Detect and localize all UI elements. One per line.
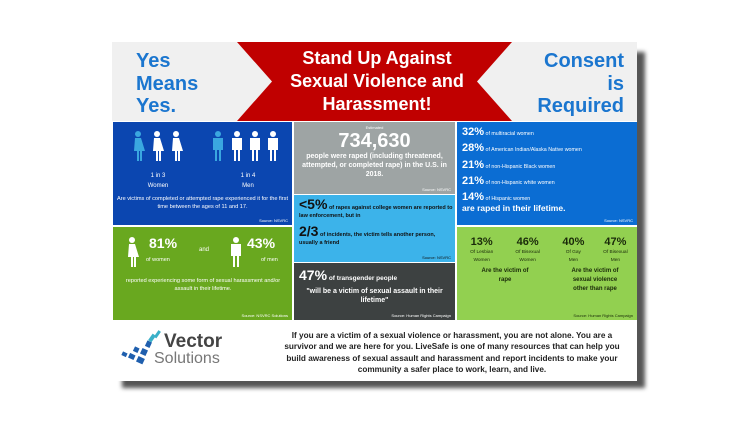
panel: college women: Source: NSVRC xyxy=(422,255,451,260)
icon: man xyxy=(231,237,241,267)
panel: race stats xyxy=(457,122,637,225)
panel: LGB stats: Women xyxy=(473,258,490,263)
panel: race stats: 32% of multiracial women xyxy=(462,126,534,138)
panel: race stats: Source: NSVRC xyxy=(604,218,633,223)
panel: LGB stats: Men xyxy=(569,258,578,263)
stat: 43%: 43% xyxy=(247,235,275,251)
heading: yes means yes: Means xyxy=(136,72,198,94)
panel: LGB stats xyxy=(457,227,637,320)
panel: LGB stats: Source: Human Rights Campaign xyxy=(573,313,633,318)
stat: 81%: 81% xyxy=(149,235,177,251)
panel: transgender: Source: Human Rights Campaign xyxy=(391,313,451,318)
panel: LGB stats: Of Bisexual xyxy=(603,250,628,255)
panel: 81% / 43%: reported experiencing some form of sexual harassment and/or assault in their lifetime. xyxy=(126,278,280,292)
footer text xyxy=(284,331,620,374)
panel: transgender: "will be a victim of sexual assault in their lifetime" xyxy=(306,288,443,304)
panel: transgender xyxy=(294,263,455,320)
panel: race stats: 14% of Hispanic women xyxy=(462,191,530,203)
panel: 1 in 3 / 1 in 4 xyxy=(113,122,292,225)
stat: 1 in 4 men xyxy=(241,172,256,189)
panel: LGB stats: Are the victim of xyxy=(481,268,528,274)
panel: LGB stats: Are the victim of xyxy=(571,268,618,274)
panel: 81% / 43%: Source: NSVRC Solutions xyxy=(242,313,288,318)
footer text: build awareness of sexual assault and harassment and report incidents to make your xyxy=(286,354,618,363)
panel: race stats: 21% of non-Hispanic white women xyxy=(462,175,555,187)
logo: Vector Solutions xyxy=(121,330,222,367)
logo: Vector Solutions: Solutions xyxy=(154,350,220,367)
panel: 81% / 43% xyxy=(113,227,292,320)
panel: 81% / 43%: of men xyxy=(261,257,278,263)
stat: 1 in 4 men: 1 in 4 xyxy=(241,173,255,179)
panel: race stats: are raped in their lifetime. xyxy=(462,203,565,213)
panel: LGB stats: 13% xyxy=(471,236,493,248)
logo: Vector Solutions: Vector xyxy=(164,331,222,352)
stat: 1 in 3 women xyxy=(148,172,168,189)
panel: college women: <5% of rapes against college women are reported to law enforcement, but in xyxy=(299,196,452,219)
panel: estimated 734,630: Source: NSVRC xyxy=(422,187,451,192)
panel: LGB stats: Of Bisexual xyxy=(515,250,540,255)
panel: college women: 2/3 of incidents, the victim tells another person, usually a friend xyxy=(299,223,435,246)
title: Stand Up Against xyxy=(302,48,452,68)
icons: women xyxy=(134,131,183,161)
stat: 1 in 3 women: Women xyxy=(148,183,168,189)
panel: estimated 734,630 xyxy=(294,122,455,194)
title xyxy=(290,48,464,114)
panel: transgender: 47% of transgender people xyxy=(299,267,397,283)
icons: men xyxy=(213,131,278,161)
panel: 81% / 43%: and xyxy=(199,247,209,253)
icon: woman xyxy=(128,237,139,267)
panel: LGB stats: other than rape xyxy=(573,286,617,292)
footer text: If you are a victim of a sexual violence or harassment, you are not alone. You are a xyxy=(292,331,612,340)
panel: LGB stats: Men xyxy=(611,258,620,263)
header xyxy=(112,42,637,121)
footer text: community a safer place to work, learn, and live. xyxy=(358,365,546,374)
heading: consent is required xyxy=(537,50,624,117)
card xyxy=(112,42,637,381)
panel: LGB stats: rape xyxy=(499,277,511,283)
big number: 734,630 xyxy=(338,130,411,152)
panel: 81% / 43%: of women xyxy=(146,257,170,263)
stat: 1 in 3 women: 1 in 3 xyxy=(151,173,165,179)
card shadow xyxy=(122,52,645,388)
panel: LGB stats: 46% xyxy=(517,236,539,248)
panel: estimated 734,630: Estimated xyxy=(366,125,383,130)
footer text: survivor and we are here for you. LiveSafe is one of many resources that can help you xyxy=(284,342,620,351)
heading: consent is required: Consent xyxy=(544,50,624,72)
heading: yes means yes: Yes xyxy=(136,50,170,72)
panel: 1 in 3 / 1 in 4: Source: NSVRC xyxy=(259,218,288,223)
panel: LGB stats: 47% xyxy=(604,236,626,248)
panel: college women xyxy=(294,195,455,262)
heading: yes means yes xyxy=(136,50,198,117)
heading: consent is required: is xyxy=(607,72,624,94)
panel: race stats: 21% of non-Hispanic Black women xyxy=(462,159,555,171)
heading: consent is required: Required xyxy=(537,95,624,117)
panel: estimated 734,630: people were raped (including threatened, attempted, or completed rape) in the U.S. in 2018. xyxy=(302,153,447,178)
panel: LGB stats: sexual violence xyxy=(573,277,617,283)
title banner xyxy=(237,42,512,121)
panel: LGB stats: Women xyxy=(519,258,536,263)
stat: 1 in 4 men: Men xyxy=(242,183,254,189)
panel: LGB stats: Of Gay xyxy=(566,250,581,255)
panel: LGB stats: 40% xyxy=(562,236,584,248)
text: Are victims of completed or attempted rape experienced it for the first time between the ages of 11 and 17. xyxy=(117,196,288,210)
panel: race stats: 28% of American Indian/Alaska Native women xyxy=(462,142,582,154)
panel: LGB stats: Of Lesbian xyxy=(470,250,493,255)
heading: yes means yes: Yes. xyxy=(136,95,176,117)
title: Harassment! xyxy=(322,94,432,114)
title: Sexual Violence and xyxy=(290,71,464,91)
